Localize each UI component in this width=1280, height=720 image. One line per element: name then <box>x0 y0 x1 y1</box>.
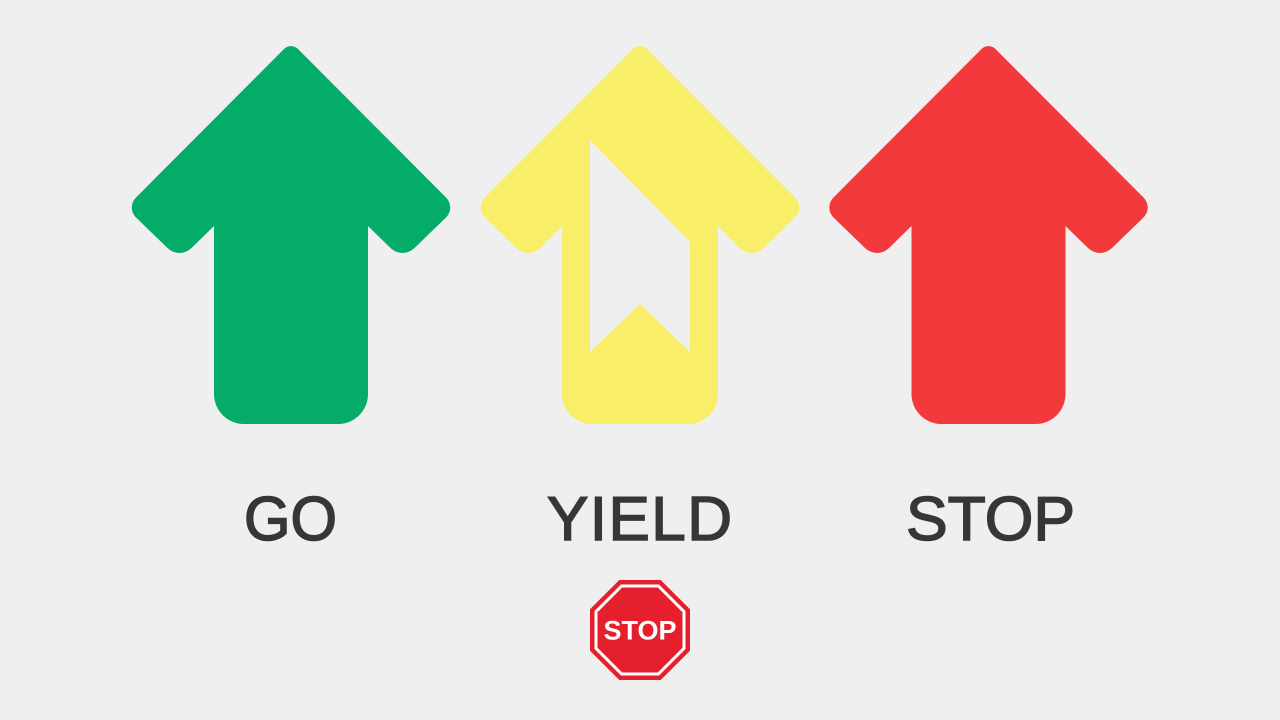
icon: red stop arrow <box>829 46 1148 424</box>
label: GO: GO <box>244 485 337 554</box>
icon: green go arrow <box>132 46 450 424</box>
label: STOP: STOP <box>906 485 1075 554</box>
icon: yellow yield arrow with cut-out <box>481 46 799 424</box>
stop sign text: STOP <box>604 616 676 646</box>
label: YIELD: YIELD <box>547 485 732 554</box>
icon: stop sign <box>590 580 690 680</box>
